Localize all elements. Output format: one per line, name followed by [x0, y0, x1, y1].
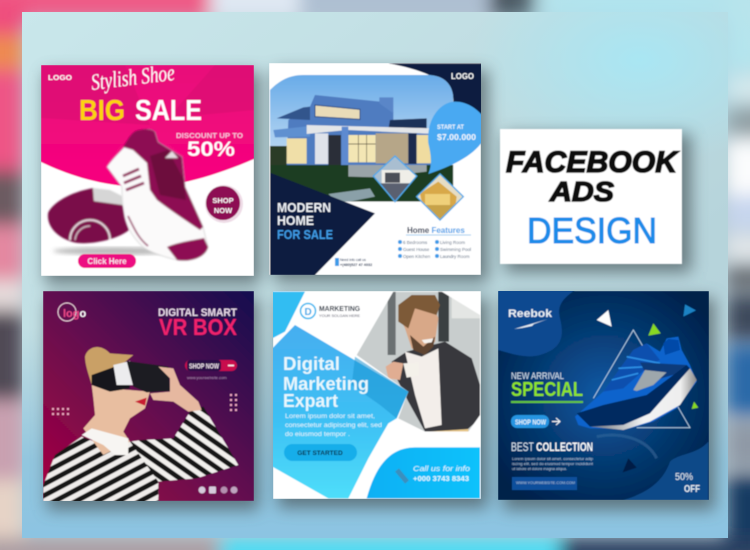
get started button: GET STARTED — [297, 450, 343, 457]
click here button — [78, 254, 136, 268]
reebok logo: Reebok — [508, 308, 553, 320]
card: Big Sale shoe ad — [41, 60, 254, 276]
best collection: iscing elit, sed do eiusmod tempor incididunt — [512, 462, 594, 466]
shop now badge — [205, 185, 243, 223]
man photo — [355, 292, 482, 446]
get started button — [284, 444, 357, 461]
logo mark — [58, 303, 86, 321]
logo mark: logo — [63, 308, 86, 320]
heading: Facebook Ads — [506, 146, 679, 207]
heading: Facebook Ads: FACEBOOK — [506, 146, 679, 179]
call text — [397, 464, 470, 483]
contact line — [335, 258, 372, 267]
digital marketing heading: Marketing — [283, 374, 369, 394]
wave blobs — [498, 290, 575, 356]
discount text: DISCOUNT UP TO — [176, 131, 243, 140]
price text: START AT — [437, 124, 464, 131]
new arrival heading: NEW ARRIVAL — [511, 371, 564, 382]
reebok logo — [508, 308, 553, 329]
best collection: Lorem ipsum dolor sit amet, consectetur adip — [512, 457, 593, 461]
modern home heading — [277, 200, 333, 242]
home features list: Laundry Room — [440, 254, 470, 259]
home features list — [398, 226, 471, 259]
lorem text — [285, 413, 382, 438]
best collection — [511, 442, 594, 471]
card: VR box ad — [43, 291, 254, 502]
inset house diamonds — [373, 156, 463, 222]
discount text: 50% — [187, 138, 235, 161]
woman with vr headset — [43, 347, 238, 502]
logo — [300, 304, 361, 318]
card: Modern home ad — [269, 63, 483, 275]
50% off: 50% — [675, 472, 693, 483]
website bar: WWW.YOURWEBSITE.COM.COM — [516, 481, 575, 485]
digital marketing heading: Digital — [283, 354, 340, 374]
home features list: 6 Bedrooms — [403, 240, 428, 245]
shop now pill: www.yourwebsite.com — [187, 375, 227, 380]
card shadows — [45, 70, 715, 510]
heading: Design: DESIGN — [527, 210, 657, 251]
big sale heading: BIG — [79, 95, 125, 127]
heading: Facebook Ads: ADS — [549, 176, 614, 207]
best collection: BEST COLLECTION — [511, 442, 593, 454]
call block shape — [367, 447, 480, 498]
logo: YOUR SOLGAN HERE — [319, 314, 360, 318]
LOGO label: LOGO — [451, 72, 474, 81]
navy triangle — [270, 173, 375, 275]
logo: MARKETING — [319, 306, 361, 313]
new arrival heading: SPECIAL — [511, 379, 583, 401]
lorem text: do eiusmod tempor . — [285, 431, 350, 438]
home features list: Home Features — [407, 226, 465, 235]
shoe shadow — [53, 247, 177, 255]
social icons — [198, 486, 238, 494]
card: Digital marketing ad — [272, 291, 482, 499]
triangle decorations — [593, 304, 698, 472]
best collection: ut labore et dolore magna aliqua. — [512, 467, 567, 471]
call text: Call us for info — [413, 464, 470, 473]
script heading: Stylish Shoe — [90, 60, 176, 95]
dot grids — [52, 394, 237, 415]
modern home heading: FOR SALE — [277, 227, 333, 242]
lorem text: Lorem ipsum dolor sit amet, — [285, 413, 375, 420]
card: Reebok special ad — [498, 290, 709, 500]
price text: $7.00.000 — [437, 132, 476, 142]
big sale heading — [80, 98, 202, 122]
contact line: +(480)527 47 4032 — [340, 263, 372, 267]
cyan diamond — [272, 325, 408, 498]
50% off — [675, 472, 700, 495]
digital marketing heading: Expart — [283, 391, 338, 411]
blue running shoe — [575, 337, 697, 430]
website bar — [512, 477, 577, 490]
call text: +000 3743 8343 — [413, 474, 469, 483]
home features list: Open Kitchen — [403, 254, 431, 259]
shoe sole — [48, 188, 129, 243]
logo: D — [304, 307, 312, 318]
50% off: OFF — [684, 484, 700, 495]
discount text — [176, 132, 244, 157]
shop now pill — [185, 360, 237, 380]
logo text: LOGO — [48, 73, 72, 82]
sunburst rays — [41, 65, 254, 125]
big sale heading: SALE — [135, 95, 202, 127]
shoe upper — [107, 129, 208, 260]
vr heading: VR BOX — [159, 314, 238, 340]
price text — [437, 124, 476, 142]
home features list: Living Room — [440, 240, 465, 245]
modern home heading: HOME — [277, 213, 314, 228]
shop now button — [511, 415, 560, 428]
shop now pill: SHOP NOW — [189, 364, 219, 370]
shop now badge: SHOP — [212, 196, 234, 205]
home features list: Guest House — [403, 247, 430, 252]
vr heading: DIGITAL SMART — [158, 307, 237, 319]
digital marketing heading — [283, 354, 369, 411]
click here button: Click Here — [87, 257, 127, 266]
price bubble — [428, 102, 483, 174]
house photo — [270, 75, 453, 203]
new arrival heading — [511, 371, 583, 403]
home features list: Swimming Pool — [440, 247, 471, 252]
shop now button: SHOP NOW — [515, 420, 546, 426]
shop now badge: NOW — [214, 206, 233, 215]
lorem text: consectetur adipiscing elit, sed — [285, 422, 382, 429]
modern home heading: MODERN — [277, 200, 331, 215]
card: Facebook Ads Design title — [500, 129, 682, 264]
vr heading — [158, 308, 238, 336]
contact line: Need info call us — [340, 258, 366, 262]
